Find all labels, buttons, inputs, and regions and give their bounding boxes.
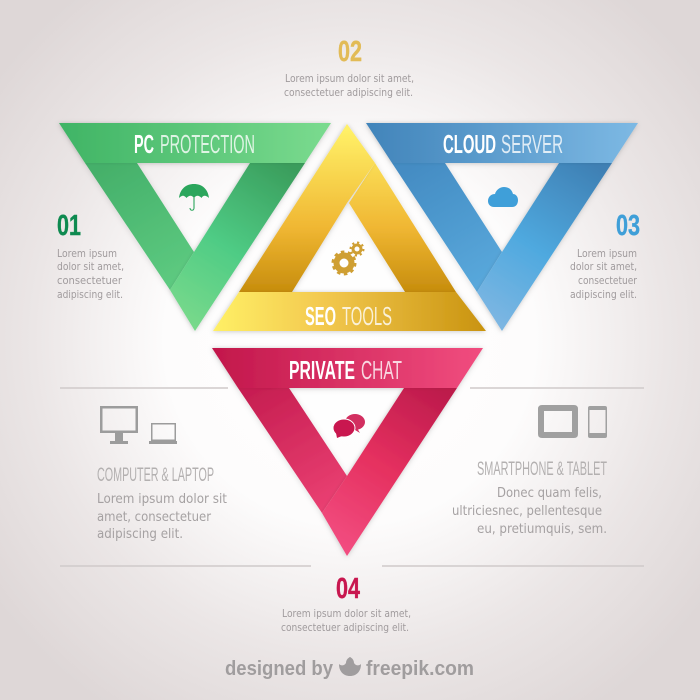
credit: designed by freepik.com: designed by <box>225 658 334 680</box>
block 01: 01 <box>57 210 81 242</box>
heading: PC Protection: PROTECTION <box>160 129 255 159</box>
icon: tablet <box>538 405 578 438</box>
heading: Private Chat: CHAT <box>361 355 402 385</box>
block 01: dolor sit amet, <box>57 261 124 273</box>
block 04: 04 <box>336 573 360 605</box>
block 04 <box>281 573 411 634</box>
icon: umbrella <box>179 184 209 210</box>
heading: PC Protection <box>134 129 255 159</box>
block 04: consectetuer adipiscing elit. <box>281 622 409 634</box>
panel: blue triangle Cloud Server <box>366 123 638 331</box>
block 03: adipiscing elit. <box>570 289 637 301</box>
heading: Cloud Server: CLOUD <box>443 129 496 159</box>
text: computer description: Lorem ipsum dolor sit <box>97 491 227 507</box>
text: smartphone description: Donec quam felis, <box>497 485 602 501</box>
heading: Computer and Laptop: COMPUTER & LAPTOP <box>97 465 214 486</box>
block 02: 02 <box>338 36 362 68</box>
block 03: dolor sit amet, <box>570 261 637 273</box>
block 03: consectetuer <box>578 275 638 287</box>
heading: SEO Tools <box>305 301 392 331</box>
block 02: consectetuer adipiscing elit. <box>284 87 413 99</box>
icon: chat bubbles <box>333 414 365 438</box>
panel: smartphone and tablet <box>452 405 607 537</box>
block 03: Lorem ipsum <box>577 248 637 260</box>
heading: Cloud Server: SERVER <box>501 129 563 159</box>
icon: gears <box>333 242 364 274</box>
text: smartphone description <box>452 485 607 537</box>
block 01: consectetuer <box>57 275 123 287</box>
text: smartphone description: ultriciesnec, pellentesque <box>452 503 602 519</box>
block 02 <box>284 36 414 99</box>
icon: phone <box>588 406 607 438</box>
block 01: adipiscing elit. <box>57 289 123 301</box>
heading: Private Chat: PRIVATE <box>289 355 355 385</box>
block 01 <box>57 210 124 301</box>
heading: Smartphone and Tablet: SMARTPHONE & TABLET <box>477 459 607 480</box>
panel: pink triangle Private Chat <box>212 348 483 556</box>
text: computer description <box>97 491 227 542</box>
icon: cloud <box>488 187 518 207</box>
credit: designed by freepik.com: freepik.com <box>366 658 474 680</box>
block 03: 03 <box>616 210 640 242</box>
text: smartphone description: eu, pretiumquis, sem. <box>477 521 607 537</box>
text: computer description: amet, consectetuer <box>97 509 211 525</box>
icon: laptop <box>149 423 177 444</box>
panel: computer and laptop <box>97 406 227 542</box>
block 01: Lorem ipsum <box>57 248 117 260</box>
icon: monitor <box>100 406 138 444</box>
divider lines <box>60 388 644 566</box>
block 02: Lorem ipsum dolor sit amet, <box>285 73 414 85</box>
heading: SEO Tools: TOOLS <box>342 301 392 331</box>
block 04: Lorem ipsum dolor sit amet, <box>282 608 411 620</box>
panel: green triangle PC Protection <box>59 123 331 331</box>
heading: SEO Tools: SEO <box>305 301 336 331</box>
heading: PC Protection: PC <box>134 129 154 159</box>
block 03 <box>570 210 640 301</box>
credit: designed by freepik.com <box>225 657 474 680</box>
panel: yellow triangle SEO Tools <box>213 124 486 331</box>
text: computer description: adipiscing elit. <box>97 526 183 542</box>
